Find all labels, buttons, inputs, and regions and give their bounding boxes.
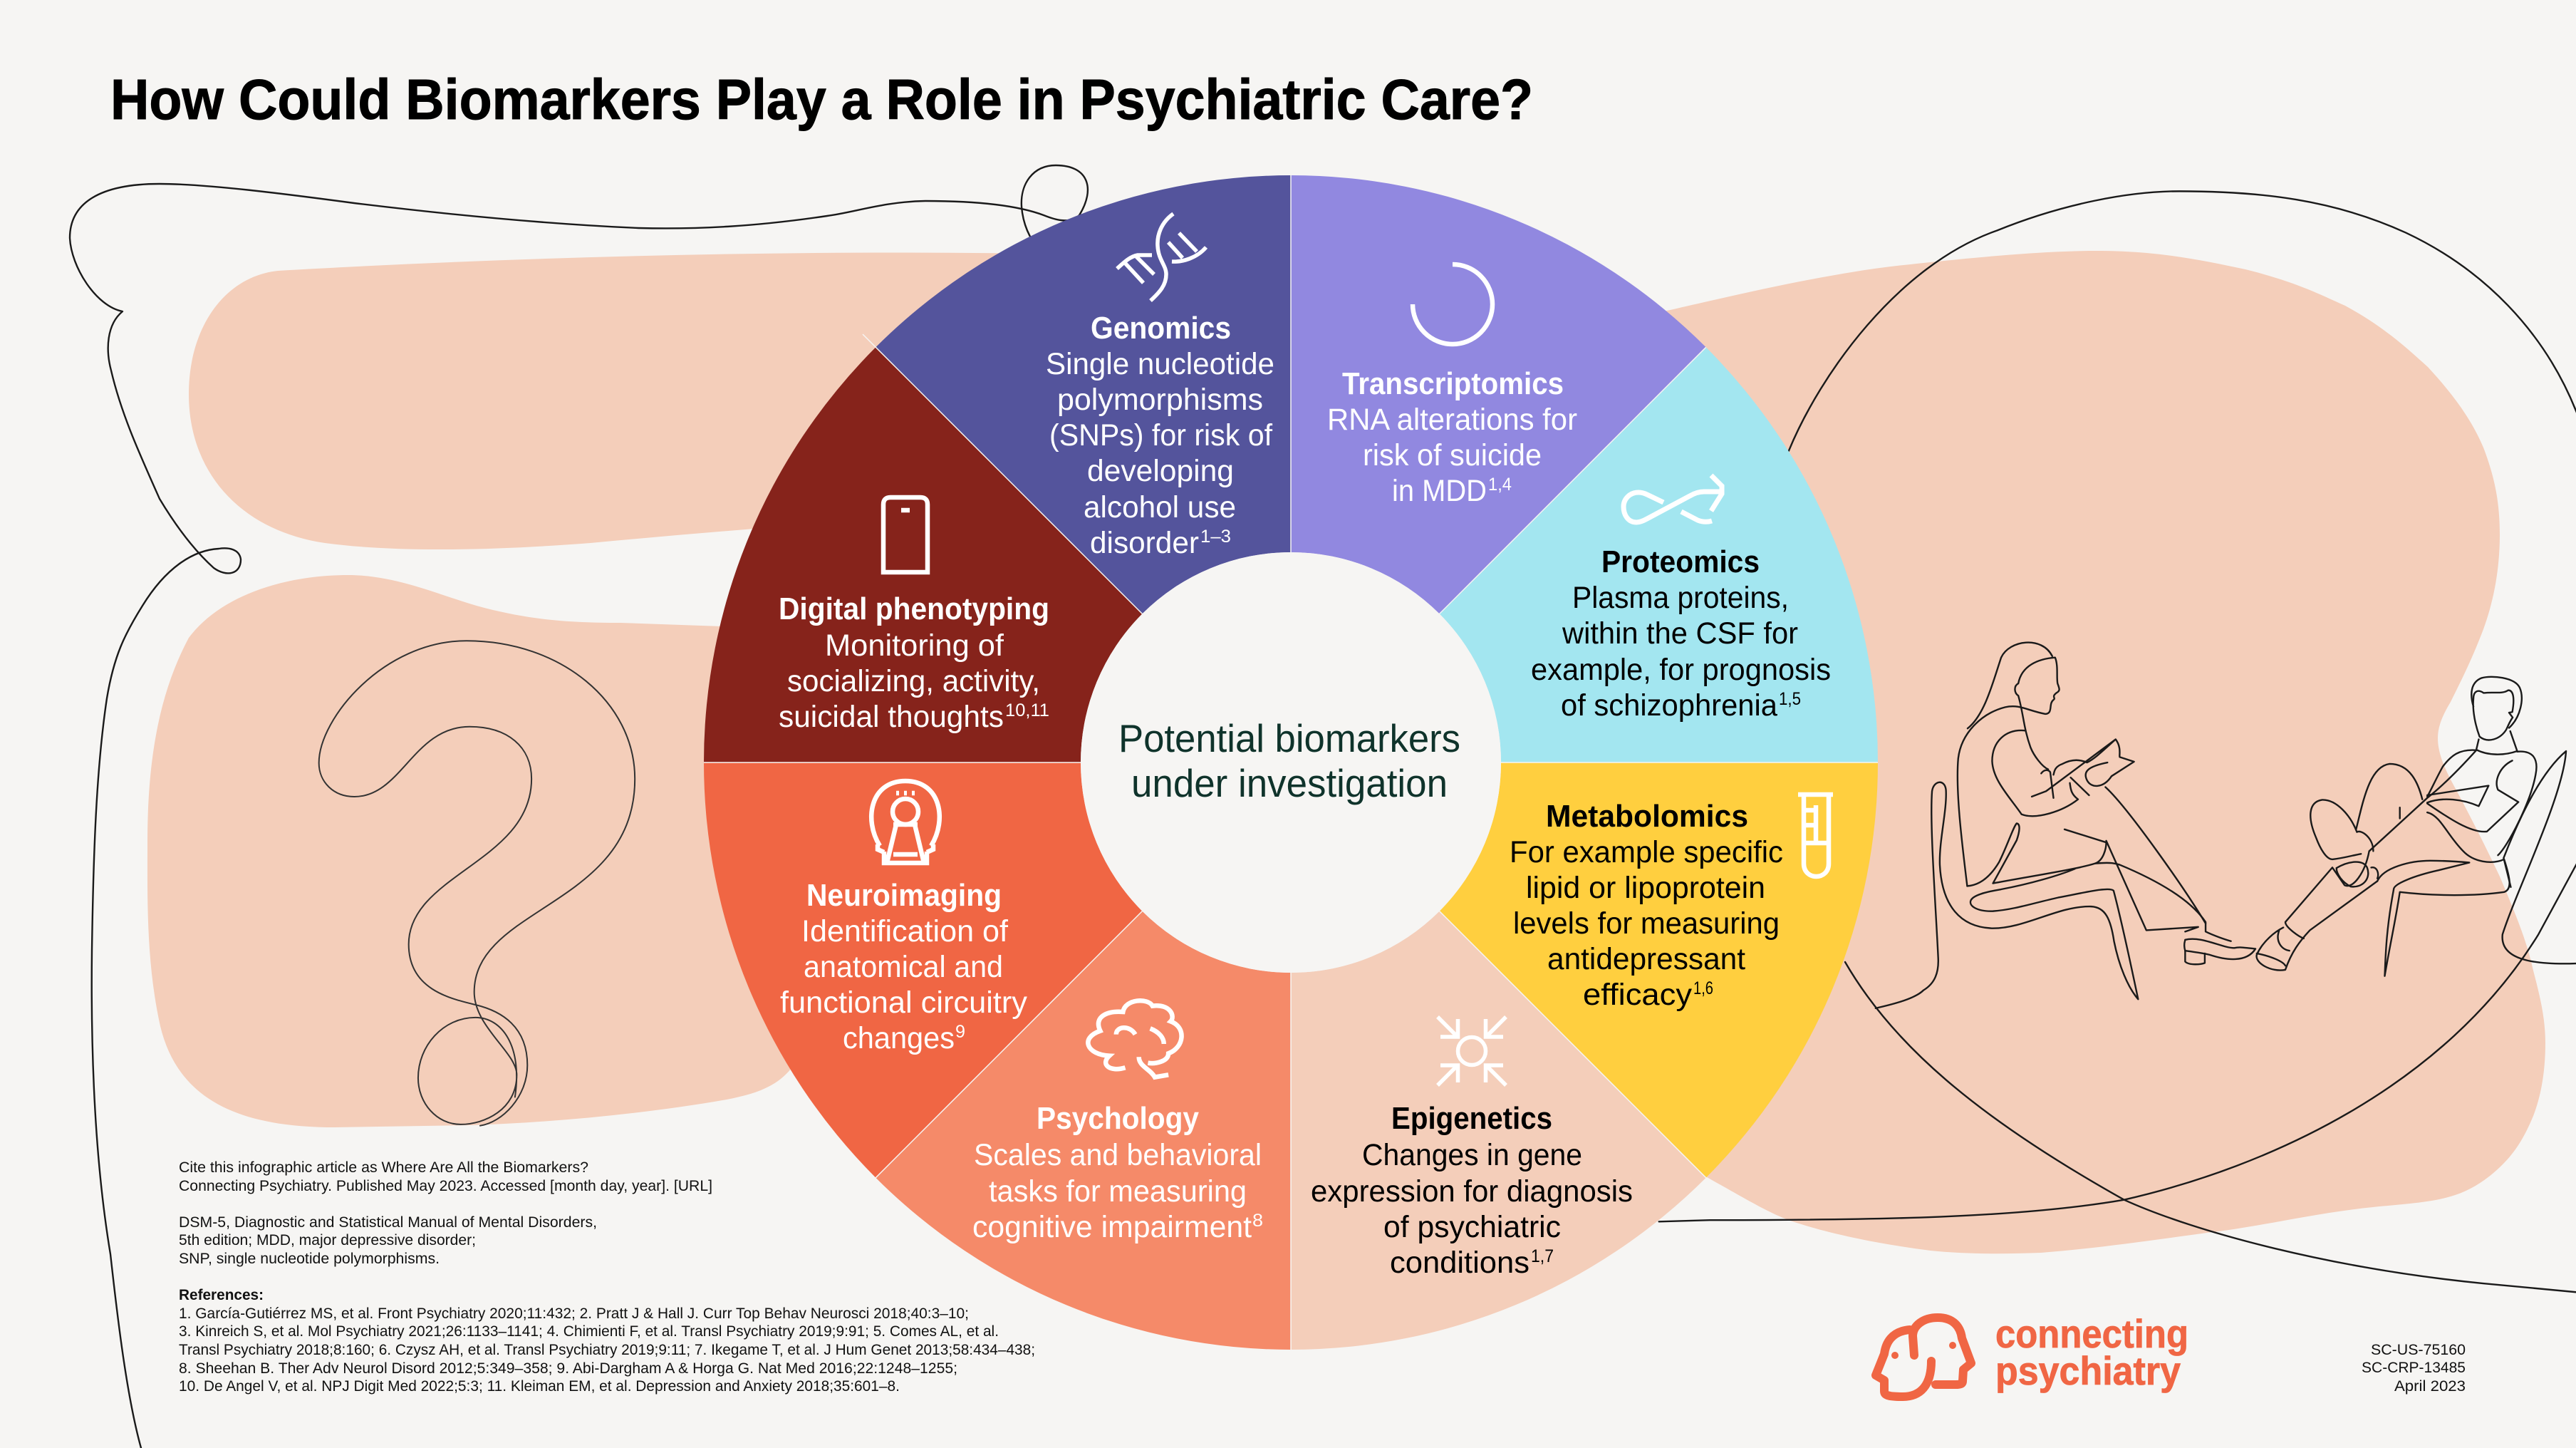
- icon: MRI scanner: [871, 781, 940, 863]
- heading: Metabolomics: [1546, 799, 1748, 834]
- references: 3. Kinreich S, et al. Mol Psychiatry 2021;26:1133–1141; 4. Chimienti F, et al. Transl Psychiatry 2019;9:91; 5. Comes AL, et al.: [179, 1323, 999, 1340]
- citation and abbreviations: DSM-5, Diagnostic and Statistical Manual of Mental Disorders,: [179, 1214, 597, 1231]
- panel: Neuroimaging: [704, 762, 1142, 1178]
- heading: Neuroimaging: [806, 878, 1002, 913]
- references: 8. Sheehan B. Ther Adv Neurol Disord 2012;5:349–358; 9. Abi-Dargham A & Horga G. Nat Med 2016;22:1248–1255;: [179, 1360, 957, 1377]
- logo: connecting psychiatry: [1876, 1311, 2188, 1397]
- description: in MDD: [1392, 474, 1487, 508]
- description: Plasma proteins,: [1572, 581, 1789, 615]
- description: 9: [955, 1022, 965, 1042]
- description: example, for prognosis: [1531, 653, 1831, 687]
- line art: left curving line with loop: [70, 165, 1088, 1448]
- panel: Proteomics: [1440, 347, 1878, 762]
- panel: Digital phenotyping: [704, 347, 1142, 762]
- description: antidepressant: [1547, 942, 1745, 976]
- line drawing: woman seated reading on chair: [1876, 643, 2255, 1008]
- panel: Metabolomics: [1440, 762, 1878, 1178]
- description: polymorphisms: [1057, 383, 1263, 417]
- description: [1531, 581, 1831, 723]
- document codes: SC-CRP-13485: [2362, 1360, 2466, 1376]
- panel: Transcriptomics: [1291, 175, 1706, 614]
- description: 1,5: [1779, 689, 1801, 709]
- heading: Genomics: [1091, 311, 1231, 346]
- description: within the CSF for: [1562, 616, 1798, 651]
- description: Single nucleotide: [1046, 347, 1274, 381]
- icon: smartphone: [883, 497, 928, 572]
- icon: brain: [1088, 1000, 1182, 1077]
- centre circle with caption: [1081, 552, 1501, 973]
- line drawing: man seated with crossed leg: [2257, 677, 2536, 976]
- description: 1,4: [1488, 475, 1512, 495]
- description: [1327, 403, 1577, 508]
- icon: test tube: [1798, 795, 1833, 876]
- panel: Psychology: [876, 911, 1291, 1350]
- description: Identification of: [801, 914, 1009, 948]
- description: suicidal thoughts: [779, 700, 1004, 734]
- citation and abbreviations: Cite this infographic article as Where Are All the Biomarkers?: [179, 1159, 588, 1176]
- references: 10. De Angel V, et al. NPJ Digit Med 2022;5:3; 11. Kleiman EM, et al. Depression and Anxiety 2018;35:601–8.: [179, 1378, 900, 1395]
- description: RNA alterations for: [1327, 403, 1577, 437]
- description: of psychiatric: [1383, 1210, 1561, 1244]
- description: Changes in gene: [1362, 1138, 1582, 1172]
- description: developing: [1087, 454, 1234, 488]
- description: [1510, 835, 1783, 1012]
- title: How Could Biomarkers Play a Role in Psychiatric Care?: [110, 68, 1533, 131]
- description: efficacy: [1583, 978, 1693, 1012]
- line art: large right curves: [1659, 191, 2576, 1292]
- description: 1,7: [1531, 1246, 1554, 1266]
- heading: Digital phenotyping: [779, 591, 1049, 626]
- logo: connecting psychiatry: psychiatry: [1995, 1348, 2181, 1393]
- centre circle with caption: under investigation: [1131, 761, 1448, 805]
- description: risk of suicide: [1363, 438, 1542, 472]
- description: 1,6: [1693, 978, 1713, 998]
- icon: two facing heads: [1876, 1318, 1971, 1397]
- description: socializing, activity,: [787, 664, 1040, 698]
- description: [779, 629, 1049, 734]
- icon: converging arrows: [1438, 1017, 1506, 1085]
- heading: Proteomics: [1601, 544, 1760, 579]
- heading: Psychology: [1037, 1101, 1199, 1136]
- logo: connecting psychiatry: connecting: [1995, 1311, 2188, 1356]
- citation and abbreviations: SNP, single nucleotide polymorphisms.: [179, 1251, 440, 1267]
- description: conditions: [1390, 1246, 1530, 1280]
- description: tasks for measuring: [989, 1174, 1247, 1209]
- centre circle with caption: Potential biomarkers: [1118, 716, 1460, 760]
- citation and abbreviations: 5th edition; MDD, major depressive disorder;: [179, 1232, 476, 1248]
- description: 8: [1252, 1211, 1263, 1231]
- description: 1–3: [1200, 527, 1231, 547]
- description: [972, 1138, 1263, 1244]
- description: of schizophrenia: [1561, 688, 1777, 723]
- heading: Transcriptomics: [1342, 366, 1564, 401]
- citation and abbreviations: [179, 1159, 712, 1267]
- description: Scales and behavioral: [974, 1138, 1262, 1172]
- description: (SNPs) for risk of: [1049, 418, 1273, 452]
- document codes: April 2023: [2394, 1378, 2466, 1395]
- description: disorder: [1090, 526, 1199, 560]
- description: expression for diagnosis: [1311, 1174, 1633, 1209]
- document codes: SC-US-75160: [2371, 1342, 2466, 1358]
- citation and abbreviations: Connecting Psychiatry. Published May 2023. Accessed [month day, year]. [URL]: [179, 1178, 712, 1194]
- description: changes: [843, 1021, 955, 1055]
- document codes: [2362, 1342, 2466, 1395]
- heading: Epigenetics: [1391, 1101, 1552, 1136]
- description: functional circuitry: [780, 986, 1027, 1020]
- description: [1311, 1138, 1633, 1280]
- description: [780, 914, 1027, 1055]
- icon: DNA strand: [1117, 214, 1206, 301]
- description: Monitoring of: [825, 629, 1004, 663]
- description: alcohol use: [1084, 490, 1236, 524]
- description: lipid or lipoprotein: [1526, 871, 1765, 905]
- icon: protein chain: [1624, 475, 1722, 522]
- icon: open ring: [1413, 264, 1492, 344]
- description: anatomical and: [804, 950, 1003, 984]
- references: 1. García-Gutiérrez MS, et al. Front Psychiatry 2020;11:432; 2. Pratt J & Hall J. Curr Top Behav Neurosci 2018;40:3–10;: [179, 1305, 969, 1322]
- description: levels for measuring: [1513, 906, 1780, 941]
- description: [1046, 347, 1274, 560]
- references: Transl Psychiatry 2018;8:160; 6. Czysz AH, et al. Transl Psychiatry 2019;9:11; 7. Ikegame T, et al. J Hum Genet 2013;58:434–438;: [179, 1342, 1035, 1358]
- panel: Epigenetics: [1291, 911, 1706, 1350]
- description: cognitive impairment: [972, 1210, 1252, 1244]
- references: [179, 1287, 1035, 1395]
- peach background blobs: [147, 251, 2545, 1253]
- description: For example specific: [1510, 835, 1783, 869]
- question mark line drawing: [319, 641, 635, 1126]
- references: References:: [179, 1287, 264, 1303]
- description: 10,11: [1005, 700, 1049, 720]
- panel: Genomics: [876, 175, 1291, 614]
